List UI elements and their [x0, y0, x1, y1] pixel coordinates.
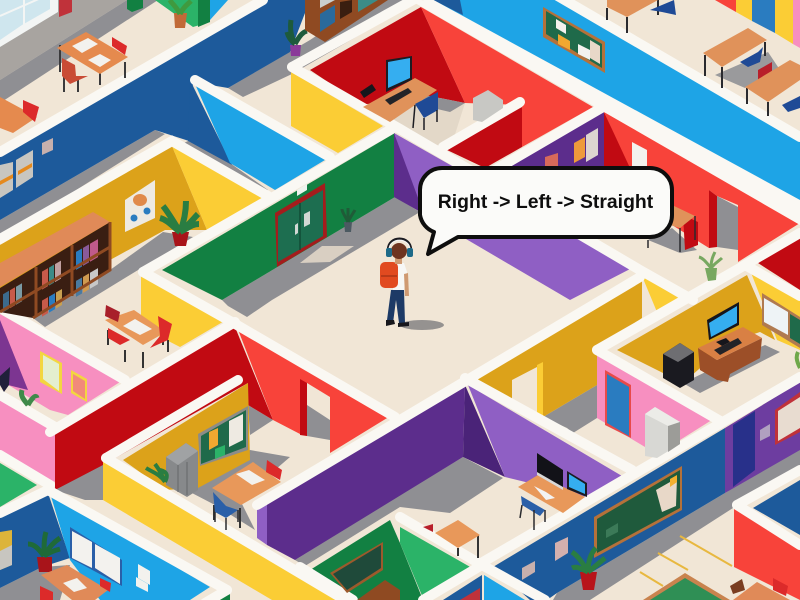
- computer desk: [698, 302, 762, 382]
- plant: red pot bottom: [572, 548, 605, 590]
- lockers gray: [166, 443, 198, 497]
- bookshelf: big: [0, 212, 110, 339]
- student with headphones and backpack: [380, 239, 413, 327]
- wall: red room: [310, 7, 593, 168]
- plant: big by yellow wall: [160, 201, 199, 246]
- red room computer desk: [360, 56, 503, 130]
- window and board on yellow wall: [762, 293, 800, 348]
- wall: bright yellow beside red room: [291, 72, 383, 153]
- wall: colored panels top right: [715, 0, 800, 48]
- wall: lower left green and blue room: [0, 463, 230, 600]
- table top: [607, 0, 676, 33]
- wall: lower yellow triangle: [141, 270, 226, 347]
- dark file cabinet: [663, 343, 694, 388]
- purple wall door and poster: [733, 392, 800, 487]
- small plant behind lockers: [146, 464, 167, 482]
- wall: dark blue partition side: [188, 80, 232, 165]
- table right 1: [703, 28, 780, 88]
- wall: upper right bright blue: [433, 0, 800, 205]
- door: green double: [275, 183, 327, 267]
- wall: green with door: [162, 133, 395, 300]
- plant: right edge: [797, 352, 800, 368]
- wall: yellow reading room: [0, 146, 262, 300]
- wall: lower purple: [257, 385, 622, 560]
- wall: bright red with doorway: [237, 327, 392, 453]
- desk behind speech bubble: [648, 205, 695, 252]
- wall: computer room: [617, 270, 800, 383]
- bottom court with yellow lines: [640, 536, 790, 600]
- pink room posters and plant: [0, 351, 87, 405]
- blue wall posters: [0, 138, 53, 198]
- wall: long dark red: [55, 327, 273, 490]
- plant: top: [170, 0, 191, 28]
- bookshelf: top: [305, 0, 388, 42]
- wall: bottom green room: [310, 520, 525, 600]
- pink room blue door: [605, 370, 631, 438]
- corkboard on blue wall: [543, 7, 605, 73]
- top-left desk with red chairs: [57, 32, 128, 92]
- speech bubble text: Right -> Left -> Straight: [438, 191, 654, 213]
- plant: small right room: [699, 252, 722, 281]
- table right 2: [745, 60, 800, 116]
- wall: long dark blue top-left: [0, 0, 310, 220]
- wall: long lower blue and purple: [493, 382, 800, 600]
- chalkboard bottom green room: [330, 542, 400, 600]
- student shadow: [400, 320, 444, 330]
- wall papers on blue wall: [522, 537, 568, 580]
- wall: right dark red: [758, 238, 800, 290]
- speech bubble: [420, 168, 672, 254]
- file cabinet white: [645, 407, 680, 458]
- white band between red room and blue wall: [415, 0, 800, 225]
- wall: pink room: [0, 314, 120, 482]
- wall: bright blue partition: [195, 84, 325, 190]
- top-left corridor wall: [0, 0, 228, 103]
- wall: purple and red room: [500, 112, 800, 262]
- desk with red chairs center left: [105, 305, 172, 368]
- wall: pink door room: [597, 352, 715, 447]
- dual monitor desk: [518, 453, 587, 530]
- plant: small by door: [342, 208, 355, 232]
- wall: bottom right red room: [734, 480, 800, 600]
- wall: inner dark yellow: [123, 383, 250, 490]
- desk bottom center: [423, 520, 480, 558]
- corkboard in yellow inner wall: [198, 406, 248, 466]
- doorway in yellow wall: [512, 362, 543, 417]
- left edge desk: [0, 97, 39, 133]
- plant: purple pot: [287, 20, 307, 56]
- floor light patches by door: [300, 246, 354, 263]
- purple room notes: [545, 128, 647, 172]
- blue wall chalkboard: [594, 466, 682, 558]
- wall: long bright yellow front: [103, 460, 345, 600]
- wall: right dark yellow: [475, 278, 642, 417]
- desk with blue chair: [212, 460, 282, 530]
- wall: central purple: [394, 133, 632, 300]
- poster on yellow wall: [125, 180, 155, 232]
- lower-left room: posters, plant, desk: [0, 527, 150, 600]
